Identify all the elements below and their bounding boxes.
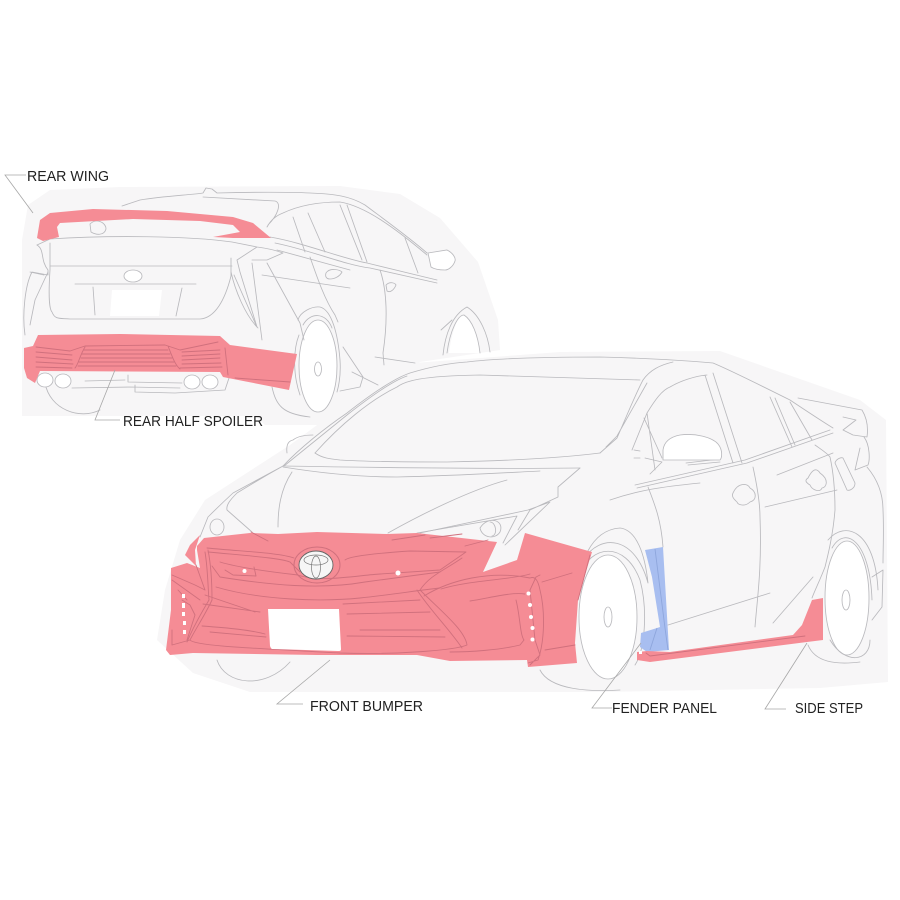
front car: side mirror — [663, 434, 722, 460]
fender panel part — [640, 547, 669, 652]
leader: rear wing — [5, 175, 33, 213]
leader: front bumper — [277, 660, 330, 704]
rear half spoiler part — [24, 334, 297, 390]
bumper side sliver — [185, 535, 200, 566]
label: fender panel: FENDER PANEL — [612, 700, 717, 717]
rear car: far front wheel — [441, 307, 490, 355]
rear car line drawing — [24, 188, 490, 417]
rear car: door handles — [326, 269, 396, 292]
front car: fog light right — [417, 516, 517, 543]
front car: tyres — [217, 660, 620, 691]
front car: spoiler and tail — [798, 398, 883, 620]
emblem — [294, 547, 340, 583]
rear wing part — [37, 209, 271, 241]
leader: fender panel — [592, 643, 641, 708]
front car: fuel door — [835, 458, 855, 490]
grey backdrop behind rear car — [22, 186, 500, 425]
front car: door handles — [732, 470, 826, 505]
front car line drawing — [200, 357, 883, 691]
front car: front wheel — [576, 528, 648, 679]
rear car: wing stay — [90, 221, 106, 234]
front car: A-pillar and side windows — [600, 362, 812, 470]
front car: fog light left — [210, 519, 224, 535]
rear car: side mirror — [428, 250, 455, 270]
front bumper part — [166, 532, 592, 667]
rear car: rear tyres — [45, 347, 378, 414]
rear car: rear wheel — [272, 307, 340, 417]
license plate — [268, 609, 341, 651]
leader: side step — [765, 643, 807, 709]
rear car: exhaust tips — [37, 373, 229, 393]
grey backdrop behind front car — [157, 351, 888, 692]
front car: door seams — [648, 445, 837, 627]
label: rear half spoiler: REAR HALF SPOILER — [123, 413, 263, 430]
label: rear wing: REAR WING — [27, 168, 109, 185]
fog reflector dots — [182, 569, 534, 642]
label: side step: SIDE STEP — [795, 700, 863, 717]
leader: rear half spoiler — [95, 370, 120, 420]
rear car: rear emblem — [124, 270, 142, 282]
label: front bumper: FRONT BUMPER — [310, 698, 423, 715]
rear car: license plate — [110, 290, 162, 316]
bumper grille lines — [207, 548, 466, 586]
side step part — [637, 598, 823, 662]
front car: rear wheel — [808, 531, 878, 663]
